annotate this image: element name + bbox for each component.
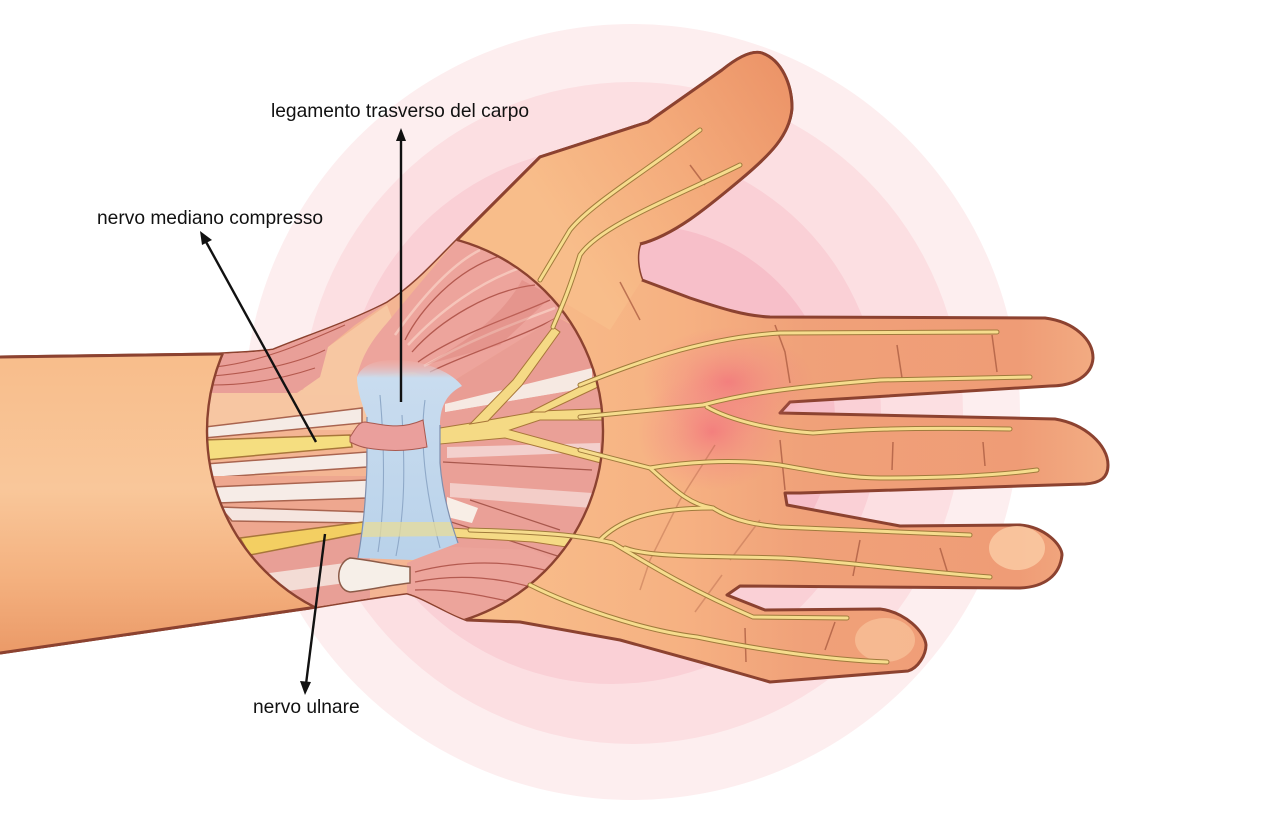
tendons: [208, 374, 602, 606]
label: nervo ulnare: nervo ulnare: [253, 697, 360, 718]
label: legamento trasverso del carpo: legamento trasverso del carpo: [271, 101, 529, 122]
compressed median nerve segment: [350, 420, 427, 450]
arrow: legamento trasverso del carpo: [396, 128, 406, 402]
forearm muscle: [200, 303, 387, 393]
pisiform tendon: [339, 558, 410, 592]
right tendons: [440, 374, 602, 560]
arrow: nervo ulnare: [300, 534, 325, 695]
thenar muscle: [357, 241, 583, 412]
hypothenar muscle: [407, 550, 545, 620]
background pain rings: [244, 24, 1020, 800]
arrow: nervo mediano compresso: [200, 231, 316, 442]
wrist cutaway outline: [207, 233, 603, 629]
hand and forearm: [0, 52, 1108, 682]
transverse carpal ligament: [350, 360, 462, 560]
median nerve: [205, 327, 620, 468]
finger nerves: [470, 130, 1037, 662]
wrist cutaway: [208, 240, 602, 620]
ulnar nerve: [240, 522, 600, 555]
skin creases: [620, 165, 997, 662]
label: nervo mediano compresso: nervo mediano compresso: [97, 208, 323, 229]
pain glow: [637, 327, 813, 490]
